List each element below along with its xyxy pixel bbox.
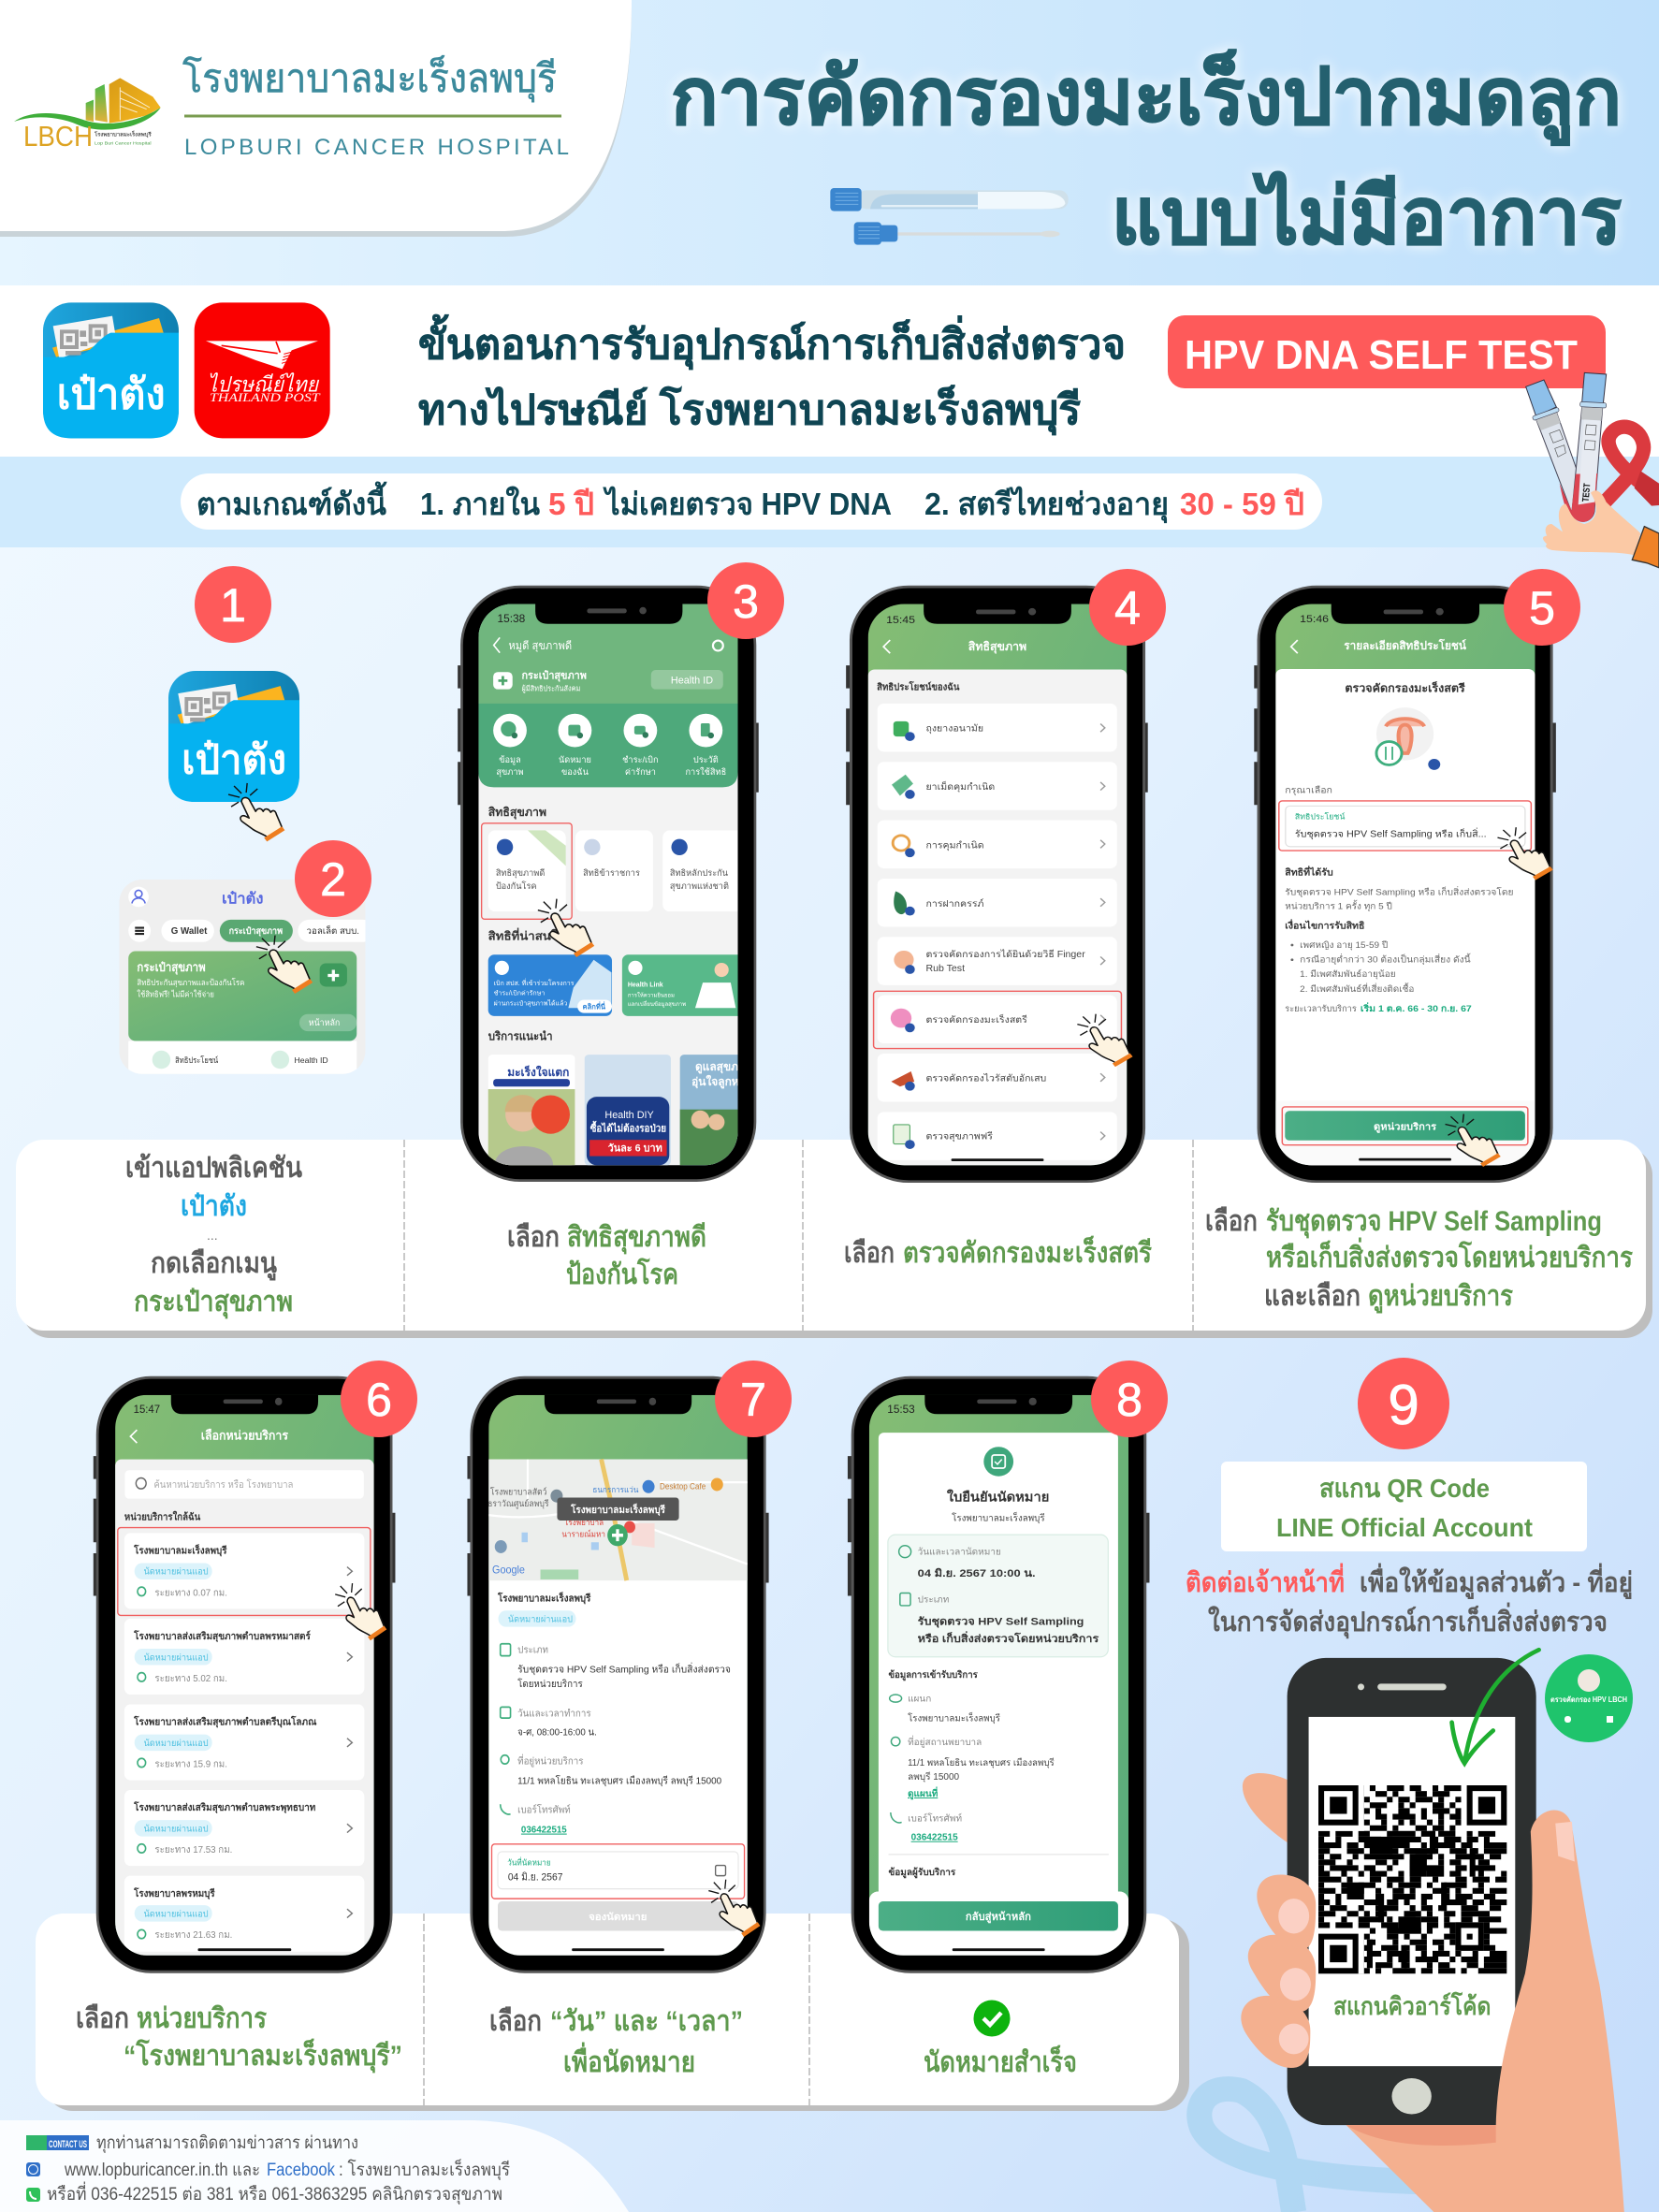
phone: step 5 benefit detail: เริ่ม 1 ต.ค. 66 - 30 ก.ย. 67 <box>1361 1001 1472 1014</box>
caption: step 7: “วัน” และ “เวลา” <box>550 2006 743 2037</box>
icon: Pao Tang app <box>43 302 179 438</box>
phone: step 6 choose service unit: 15:47 <box>134 1403 160 1416</box>
phone: step 6 choose service unit: นัดหมายผ่านแอป <box>143 1566 209 1578</box>
phone: step 3 health wallet: วันละ 6 บาท <box>608 1143 662 1155</box>
step 9 QR instruction box <box>1221 1462 1587 1551</box>
phone: step 3 health wallet: 15:38 <box>497 612 526 625</box>
phone: step 5 benefit detail: ระยะเวลารับบริการ <box>1285 1004 1357 1014</box>
phone: step 7 service unit detail: Google <box>492 1564 525 1577</box>
badge 5 <box>1504 569 1580 646</box>
phone: step 3 health wallet: สิทธิสุขภาพดี <box>495 868 545 879</box>
phone: step 5 benefit detail: ดูหน่วยบริการ <box>1374 1122 1436 1133</box>
phone: step 7 service unit detail: ธราวัณศูนย์ลพบุรี <box>488 1497 549 1509</box>
phone: step 5 benefit detail: เงื่อนไขการรับสิทธิ <box>1285 919 1365 931</box>
phone: step 4 benefits list: Rub Test <box>925 965 965 974</box>
banner heading <box>418 313 1126 436</box>
back of hand <box>1243 1773 1511 2212</box>
app home screenshot step 2: ใช้สิทธิฟรี! ไม่มีค่าใช้จ่าย <box>137 989 214 998</box>
phone: step 8 confirmation: ข้อมูลการเข้ารับบริการ <box>888 1669 978 1681</box>
phone: step 7 service unit detail: ที่อยู่หน่วยบริการ <box>517 1754 584 1768</box>
banner heading: ทางไปรษณีย์ โรงพยาบาลมะเร็งลพบุรี <box>418 385 1081 436</box>
phone: step 3 health wallet: แลกเปลี่ยนข้อมูลสุขภาพ <box>628 1000 686 1008</box>
icon: Thailand Post app <box>195 302 330 438</box>
badge 6: 6 <box>366 1374 392 1426</box>
caption: step 5: รับชุดตรวจ HPV Self Sampling <box>1266 1206 1602 1239</box>
phone: step 6 choose service unit: นัดหมายผ่านแอป <box>143 1739 209 1749</box>
badge 1: 1 <box>220 579 246 632</box>
phone: step 6 choose service unit: ระยะทาง 5.02 กม. <box>154 1674 227 1684</box>
caption: step 6 <box>76 2003 402 2074</box>
contact us badge: CONTACT US <box>49 2139 87 2150</box>
phone: step 8 confirmation: ข้อมูลผู้รับบริการ <box>888 1867 956 1879</box>
phone: step 7 service unit detail: วันและเวลาทำการ <box>517 1709 591 1719</box>
phone: step 5 benefit detail: สิทธิที่ได้รับ <box>1285 866 1333 879</box>
phone: step 5 benefit detail: กรุณาเลือก <box>1285 784 1332 795</box>
icon: Thailand Post app: THAILAND POST <box>210 391 321 404</box>
phone: step 6 choose service unit: โรงพยาบาลมะเร็งลพบุรี <box>133 1543 227 1558</box>
caption: step 5: เลือก <box>1205 1206 1258 1237</box>
step 9 QR instruction box: LINE Official Account <box>1276 1513 1533 1542</box>
badge 4 <box>1089 569 1166 646</box>
main title: แบบไม่มีอาการ <box>1112 171 1622 260</box>
phone: step 6 choose service unit: หน่วยบริการใกล้ฉัน <box>124 1510 200 1522</box>
criteria band <box>0 457 1659 547</box>
caption: step 1 and 2: ... <box>207 1228 218 1243</box>
awareness ribbon <box>1200 2089 1423 2212</box>
phone: step 4 benefits list: 15:45 <box>886 614 915 626</box>
phone: step 4 benefits list: ตรวจคัดกรองมะเร็งสตรี <box>925 1012 1027 1026</box>
icon: Pao Tang app step 1: เป๋าตัง <box>182 737 286 782</box>
app home screenshot step 2: กระเป๋าสุขภาพ <box>229 925 283 937</box>
criteria text: 30 - 59 ปี <box>1180 487 1304 521</box>
LINE official account badge: ตรวจคัดกรอง HPV LBCH <box>1550 1695 1627 1704</box>
caption: step 4: เลือก <box>844 1238 895 1269</box>
icon: LBCH logo <box>14 78 161 153</box>
caption: step 3: ป้องกันโรค <box>566 1257 678 1290</box>
phone: step 7 service unit detail: เบอร์โทรศัพท์ <box>517 1803 571 1816</box>
phone: step 6 choose service unit: โรงพยาบาลส่งเสริมสุขภาพตำบลพรหมาสตร์ <box>133 1630 311 1643</box>
step number badges <box>195 562 1580 1449</box>
phone: step 6 choose service unit: ระยะทาง 21.63 กม. <box>154 1930 232 1941</box>
phone: step 8 confirmation: ใบยืนยันนัดหมาย <box>947 1489 1049 1505</box>
caption: step 6: “โรงพยาบาลมะเร็งลพบุรี” <box>124 2038 402 2074</box>
icon: Thailand Post app: ไปรษณีย์ไทย <box>208 371 320 396</box>
phone: step 4 benefits list: การคุมกำเนิด <box>925 840 984 851</box>
phone: step 4 benefits list: ตรวจคัดกรองการได้ยินด้วยวิธี Finger <box>925 949 1085 960</box>
phone: step 3 health wallet: สิทธิสุขภาพ <box>488 806 546 820</box>
main title <box>671 49 1622 260</box>
app home screenshot step 2: กระเป๋าสุขภาพ <box>137 960 206 975</box>
phone: step 7 service unit detail: โรงพยาบาลมะเร็งลพบุรี <box>497 1591 591 1605</box>
badge 2 <box>295 840 371 917</box>
phone: step 6 choose service unit <box>94 1377 395 1972</box>
phone: step 7 service unit detail: โรงพยาบาลสัตว์ <box>490 1486 547 1497</box>
phone: step 5 benefit detail: 2. มีเพศสัมพันธ์ที่เสี่ยงติดเชื้อ <box>1300 982 1414 995</box>
step 9 contact text: ติดต่อเจ้าหน้าที่ <box>1186 1563 1345 1598</box>
hospital name English: LOPBURI CANCER HOSPITAL <box>184 135 569 160</box>
caption: step 8 with success check <box>924 2001 1077 2078</box>
icon: Pao Tang app step 1 <box>168 671 299 802</box>
step 9 contact text <box>1186 1563 1633 1638</box>
main title: การคัดกรองมะเร็งปากมดลูก <box>671 49 1622 146</box>
phone: step 8 confirmation: 036422515 <box>911 1833 958 1843</box>
LINE official account badge <box>1545 1654 1633 1742</box>
badge 1 <box>195 566 271 643</box>
phone: step 8 confirmation: วันและเวลานัดหมาย <box>918 1548 1001 1558</box>
phone: step 7 service unit detail: 11/1 พหลโยธิน ทะเลชุบศร เมืองลพบุรี ลพบุรี 15000 <box>517 1774 722 1787</box>
phone: step 3 health wallet: สิทธิข้าราชการ <box>583 867 640 878</box>
icon: LBCH logo: โรงพยาบาลมะเร็งลพบุรี <box>94 130 153 138</box>
phone: step 8 confirmation: ลพบุรี 15000 <box>908 1771 960 1783</box>
caption: step 1 and 2: เป๋าตัง <box>181 1191 247 1222</box>
phone: step 3 health wallet: การให้ความยินยอม <box>628 991 675 998</box>
caption: step 6: เลือก <box>76 2003 129 2034</box>
front of hand <box>1346 1811 1624 2212</box>
test tubes, ribbon and hand decoration: TEST <box>1581 483 1593 502</box>
phone: step 3 health wallet: ป้องกันโรค <box>496 880 537 891</box>
phone: step 4 benefits list: ตรวจสุขภาพฟรี <box>925 1131 993 1142</box>
phone: step 8 confirmation: แผนก <box>908 1695 931 1705</box>
phone: step 3 health wallet: Health ID <box>671 676 713 687</box>
step 9 contact text: ในการจัดส่งอุปกรณ์การเก็บสิ่งส่งตรวจ <box>1208 1602 1608 1638</box>
footer contact block <box>0 2120 629 2212</box>
app home screenshot step 2: สิทธิประกันสุขภาพและป้องกันโรค <box>137 978 245 988</box>
criteria text <box>196 481 1304 524</box>
phone: step 4 benefits list: การฝากครรภ์ <box>925 898 984 910</box>
icon: globe <box>26 2162 40 2176</box>
phone: step 6 choose service unit: โรงพยาบาลส่งเสริมสุขภาพตำบลตรีบุณโลภณ <box>133 1715 317 1729</box>
phone: step 6 choose service unit: โรงพยาบาลส่งเสริมสุขภาพตำบลพระพุทธบาท <box>133 1801 316 1814</box>
caption: step 7 <box>489 2006 743 2078</box>
badge 6 <box>341 1361 417 1437</box>
caption: step 1 and 2: เข้าแอปพลิเคชัน <box>125 1153 302 1184</box>
phone: step 7 service unit detail: นัดหมายผ่านแอป <box>508 1614 573 1625</box>
QR code <box>1318 1785 1506 1973</box>
phone: step 3 health wallet: บริการแนะนำ <box>488 1029 553 1042</box>
phone: step 7 service unit detail: Desktop Cafe <box>660 1481 706 1492</box>
badge 7 <box>715 1361 792 1437</box>
phone: step 8 confirmation: โรงพยาบาลมะเร็งลพบุรี <box>908 1711 1001 1724</box>
phone: step 8 confirmation: กลับสู่หน้าหลัก <box>966 1911 1031 1924</box>
phone: step 5 benefit detail: กรณีอายุต่ำกว่า 30 ต้องเป็นกลุ่มเสี่ยง ดังนี้ <box>1300 953 1471 965</box>
caption: step 1 and 2: กระเป๋าสุขภาพ <box>134 1287 293 1319</box>
icon: LBCH logo: LBCH <box>23 121 93 153</box>
phone: step 3 health wallet: ประวัติ <box>693 755 719 764</box>
icon: specimen tube and swab <box>830 188 1069 245</box>
phone: step 7 service unit detail: จ-ศ, 08:00-16:00 น. <box>517 1727 597 1739</box>
app home screenshot step 2: G Wallet <box>171 926 208 937</box>
banner heading: ขั้นตอนการรับอุปกรณ์การเก็บสิ่งส่งตรวจ <box>418 313 1126 371</box>
caption: step 1 and 2: กดเลือกเมนู <box>151 1248 277 1281</box>
phone: step 7 service unit detail: รับชุดตรวจ HPV Self Sampling หรือ เก็บสิ่งส่งตรวจ <box>517 1662 731 1676</box>
badge 8: 8 <box>1116 1374 1142 1426</box>
caption: step 1 and 2 <box>125 1153 302 1319</box>
phone: step 6 choose service unit: ระยะทาง 17.53 กม. <box>154 1845 232 1855</box>
app home screenshot step 2: หน้าหลัก <box>309 1017 340 1027</box>
phone: step 7 service unit detail: วันที่นัดหมาย <box>507 1856 551 1868</box>
phone: step 7 service unit detail: ธนกรการแว่น <box>592 1485 639 1494</box>
phone: step 3 health wallet: กระเป๋าสุขภาพ <box>521 669 587 682</box>
panel: steps 1 to 5 captions <box>16 1140 1652 1338</box>
phone: step 5 benefit detail: 15:46 <box>1300 613 1329 625</box>
caption: step 5 <box>1205 1206 1633 1314</box>
phone: step 5 benefit detail: ตรวจคัดกรองมะเร็งสตรี <box>1345 681 1465 694</box>
app home screenshot step 2: วอลเล็ต สบบ. <box>307 924 359 937</box>
badge 4: 4 <box>1114 582 1141 634</box>
icon: Pao Tang app: เป๋าตัง <box>57 371 166 418</box>
phone: step 3 health wallet: สิทธิที่น่าสนใจ <box>488 928 564 943</box>
app home screenshot step 2: สิทธิประโยชน์ <box>175 1055 218 1065</box>
icon: phone <box>26 2188 40 2202</box>
caption: step 5: ดูหน่วยบริการ <box>1368 1281 1513 1314</box>
caption: step 3: สิทธิสุขภาพดี <box>567 1222 706 1255</box>
phone: step 3 health wallet: ผู้มีสิทธิประกันสังคม <box>521 684 580 693</box>
criteria text: 5 ปี <box>548 487 594 521</box>
phone: step 3 health wallet: ผ่านกระเป๋าสุขภาพได้แล้ว <box>494 999 567 1008</box>
caption: step 6: หน่วยบริการ <box>137 2003 267 2034</box>
step 9 contact text: เพื่อให้ข้อมูลส่วนตัว - ที่อยู่ <box>1360 1563 1633 1599</box>
phone: step 6 choose service unit: นัดหมายผ่านแอป <box>143 1909 209 1919</box>
app home screenshot step 2 <box>119 880 374 1074</box>
white banner band <box>0 285 1659 457</box>
phone: step 8 confirmation: เบอร์โทรศัพท์ <box>908 1812 962 1824</box>
phone: step 3 health wallet: การใช้สิทธิ <box>685 766 726 777</box>
phone: step 5 benefit detail: สิทธิประโยชน์ <box>1295 812 1346 821</box>
footer contact block: ทุกท่านสามารถติดตามข่าวสาร ผ่านทาง <box>96 2133 358 2154</box>
phone: step 4 benefits list: สิทธิสุขภาพ <box>968 639 1026 654</box>
phone: step 3 health wallet: สุขภาพแห่งชาติ <box>670 881 729 892</box>
phone: step 6 choose service unit: ระยะทาง 0.07 กม. <box>154 1588 227 1599</box>
caption: step 3 <box>507 1222 706 1290</box>
app home screenshot step 2: Health ID <box>295 1055 328 1065</box>
caption: scan QR code: สแกนคิวอาร์โค้ด <box>1333 1991 1491 2020</box>
phone: step 8 confirmation: ประเภท <box>918 1594 949 1605</box>
caption: step 8 with success check: นัดหมายสำเร็จ <box>924 2045 1077 2078</box>
caption: step 7: เพื่อนัดหมาย <box>563 2042 695 2078</box>
phone: step 3 health wallet: นัดหมาย <box>559 755 591 764</box>
footer contact block: www.lopburicancer.in.th และ <box>64 2161 260 2180</box>
fingers <box>1241 1875 1316 2068</box>
HPV DNA self test badge: HPV DNA SELF TEST <box>1185 332 1578 378</box>
badge 3 <box>707 562 784 639</box>
phone: step 4 benefits list: ยาเม็ดคุมกำเนิด <box>925 779 995 793</box>
phone: step 8 confirmation: โรงพยาบาลมะเร็งลพบุรี <box>952 1511 1045 1524</box>
caption: step 7: เลือก <box>489 2006 542 2037</box>
phone: step 6 choose service unit: ระยะทาง 15.9 กม. <box>154 1759 227 1770</box>
phone: step 7 service unit detail: โดยหน่วยบริการ <box>517 1677 583 1690</box>
phone: step 6 choose service unit: นัดหมายผ่านแอป <box>143 1652 209 1663</box>
phone: step 3 health wallet: Health Link <box>628 982 663 988</box>
criteria text: 2. สตรีไทยช่วงอายุ <box>924 486 1169 524</box>
phone: step 3 health wallet: ของฉัน <box>561 767 589 777</box>
phone: step 3 health wallet: ข้อมูล <box>499 754 521 765</box>
phone: step 8 confirmation <box>848 1377 1149 1972</box>
phone: step 3 health wallet: ชำระ/เบิกค่ารักษา <box>494 990 545 997</box>
hospital logo card <box>0 0 632 237</box>
badge 8 <box>1091 1361 1168 1437</box>
illustration: hand holding phone with QR <box>1200 1650 1624 2212</box>
caption: step 4 <box>844 1235 1152 1269</box>
phone: step 4 benefits list <box>846 587 1148 1182</box>
phone: step 7 service unit detail: ประเภท <box>517 1645 548 1656</box>
phone: step 3 health wallet: Health DIY <box>604 1110 654 1121</box>
contact us badge <box>26 2135 89 2150</box>
phone: step 6 choose service unit: นัดหมายผ่านแอป <box>143 1824 209 1834</box>
phone: step 5 benefit detail: 1. มีเพศสัมพันธ์อายุน้อย <box>1300 969 1396 980</box>
phone: step 4 benefits list: ถุงยางอนามัย <box>925 724 983 735</box>
phone: step 7 service unit detail: โรงพยาบาล <box>564 1518 604 1527</box>
phone: step 5 benefit detail: รับชุดตรวจ HPV Self Sampling หรือ เก็บสิ่... <box>1295 827 1487 839</box>
phone: step 8 confirmation: 04 มิ.ย. 2567 10:00 น. <box>918 1567 1036 1579</box>
criteria text: ตามเกณฑ์ดังนี้ <box>196 481 387 521</box>
test tubes, ribbon and hand decoration <box>1526 372 1659 568</box>
badge 5: 5 <box>1529 582 1555 634</box>
phone: step 7 service unit detail: 04 มิ.ย. 2567 <box>508 1871 562 1883</box>
phone: step 7 service unit detail: จองนัดหมาย <box>589 1912 648 1923</box>
phone: step 3 health wallet: สุขภาพ <box>496 767 524 778</box>
phone: step 6 choose service unit: เลือกหน่วยบริการ <box>201 1428 288 1443</box>
caption: step 5: และเลือก <box>1264 1281 1361 1312</box>
phone: step 6 choose service unit: โรงพยาบาลพรหมบุรี <box>133 1886 215 1900</box>
phone: step 7 service unit detail <box>467 1377 769 1972</box>
phone: step 7 service unit detail: 036422515 <box>521 1825 567 1836</box>
badge 9: 9 <box>1388 1374 1419 1436</box>
phone: step 3 health wallet <box>458 587 761 1181</box>
badge 9 <box>1358 1358 1449 1449</box>
panel: steps 6 to 8 captions <box>36 1914 1189 2111</box>
phone: step 8 confirmation: หรือ เก็บสิ่งส่งตรวจโดยหน่วยบริการ <box>918 1631 1099 1645</box>
phone: step 4 benefits list: ตรวจคัดกรองไวรัสตับอักเสบ <box>925 1073 1046 1084</box>
phone: step 3 health wallet: มะเร็งใจแตก <box>507 1065 569 1079</box>
phone: step 4 benefits list: สิทธิประโยชน์ของฉัน <box>877 681 960 693</box>
footer contact block: Facebook <box>267 2161 335 2180</box>
phone: step 8 confirmation: 11/1 พหลโยธิน ทะเลชุบศร เมืองลพบุรี <box>908 1756 1055 1768</box>
footer contact block: : โรงพยาบาลมะเร็งลพบุรี <box>339 2158 510 2181</box>
phone: step 8 confirmation: รับชุดตรวจ HPV Self Sampling <box>918 1615 1084 1628</box>
phone: step 5 benefit detail: รายละเอียดสิทธิประโยชน์ <box>1344 638 1466 652</box>
hospital name Thai: โรงพยาบาลมะเร็งลพบุรี <box>182 55 557 103</box>
phone body <box>1288 1658 1536 2125</box>
step 9 QR instruction box: สแกน QR Code <box>1319 1474 1490 1503</box>
app home screenshot step 2: เป๋าตัง <box>222 891 264 908</box>
phone: step 7 service unit detail: โรงพยาบาลมะเร็งลพบุรี <box>570 1502 665 1517</box>
phone: step 3 health wallet: ชำระ/เบิก <box>622 755 659 764</box>
badge 2: 2 <box>320 853 346 906</box>
phone: step 5 benefit detail: รับชุดตรวจ HPV Self Sampling หรือ เก็บสิ่งส่งตรวจโดย <box>1285 886 1514 897</box>
badge 7: 7 <box>740 1374 766 1426</box>
icon: LBCH logo: Lop Buri Cancer Hospital <box>95 140 152 146</box>
phone: step 3 health wallet: ค่ารักษา <box>625 767 656 777</box>
criteria text: 1. ภายใน <box>420 486 540 521</box>
green check arrow <box>1452 1650 1539 1763</box>
phone: step 5 benefit detail: เพศหญิง อายุ 15-59 ปี <box>1300 940 1388 951</box>
phone: step 8 confirmation: ดูแผนที่ <box>908 1786 939 1800</box>
phone: step 8 confirmation: 15:53 <box>887 1404 915 1416</box>
phone: step 8 confirmation: ที่อยู่สถานพยาบาล <box>908 1735 982 1748</box>
caption: step 4: ตรวจคัดกรองมะเร็งสตรี <box>903 1235 1152 1269</box>
phone: step 5 benefit detail <box>1254 587 1556 1182</box>
phone: step 7 service unit detail: นารายณ์มหา <box>561 1529 605 1539</box>
criteria text: ไม่เคยตรวจ HPV DNA <box>603 486 892 521</box>
badge 3: 3 <box>733 575 759 628</box>
phone: step 3 health wallet: หมูดี สุขภาพดี <box>508 639 572 653</box>
phone: step 3 health wallet: ซื้อได้ไม่ต้องรอป่วย <box>590 1121 666 1135</box>
hand pointer: step 1 <box>228 783 284 841</box>
footer contact block: หรือที่ 036-422515 ต่อ 381 หรือ 061-3863295 คลินิกตรวจสุขภาพ <box>47 2181 502 2205</box>
phone: step 3 health wallet: เบิก สปส. ที่เข้าร่วมโครงการ <box>494 979 575 987</box>
caption: step 3: เลือก <box>507 1222 560 1253</box>
phone: step 6 choose service unit: ค้นหาหน่วยบริการ หรือ โรงพยาบาล <box>153 1478 293 1491</box>
phone: step 5 benefit detail: หน่วยบริการ 1 ครั้ง ทุก 5 ปี <box>1285 899 1392 911</box>
phone: step 3 health wallet: สิทธิหลักประกัน <box>669 868 729 878</box>
phone: step 3 health wallet: คลิกที่นี่ <box>583 1000 606 1011</box>
phone: step 3 health wallet: ดูแลสุขภาพ <box>695 1060 752 1074</box>
phone: step 3 health wallet: อุ่นใจลูกหลาน <box>691 1074 761 1089</box>
HPV DNA self test badge <box>1168 315 1606 388</box>
